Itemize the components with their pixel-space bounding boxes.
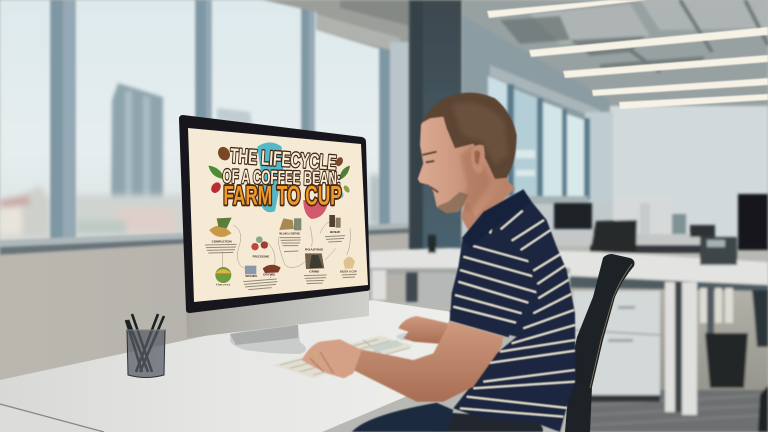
stage description text lines <box>205 236 357 290</box>
monitor chin <box>186 288 369 338</box>
stubble <box>438 192 468 214</box>
window blind at top <box>262 0 410 52</box>
stage labels: GRIND <box>309 270 319 274</box>
left windows <box>0 0 410 400</box>
pens <box>126 314 164 372</box>
eye and brow <box>422 152 437 162</box>
cheek shadow <box>460 145 492 212</box>
neck <box>461 177 515 233</box>
desk legs <box>372 270 697 415</box>
shirt sleeve stripes <box>453 245 537 323</box>
trousers <box>352 403 453 432</box>
title line three: FARM TO CUP <box>223 180 342 210</box>
chair armrest <box>433 413 543 432</box>
pen holder <box>126 314 165 378</box>
mid office desk <box>370 248 768 285</box>
distant skyscraper <box>111 83 252 215</box>
stage labels: ROASTING <box>305 248 324 252</box>
small desk object <box>428 235 436 253</box>
stage labels: PROCESSING <box>253 255 270 259</box>
collar <box>462 189 532 248</box>
far right chair <box>752 290 768 347</box>
shirt sleeve hem <box>450 310 515 337</box>
white posts behind <box>700 288 733 323</box>
ceiling and back wall <box>462 0 768 246</box>
monitor bezel <box>179 115 370 313</box>
filing cabinet <box>573 291 660 401</box>
ceiling lights <box>487 0 768 109</box>
hair <box>421 93 517 179</box>
shirt stripes <box>460 211 575 417</box>
distant city <box>0 175 380 238</box>
window return wall <box>390 42 410 228</box>
foreground desk <box>0 300 452 432</box>
window sill <box>0 223 410 248</box>
ceiling <box>462 0 768 110</box>
stage labels: BREW <box>330 230 340 234</box>
desk telephone <box>700 237 737 265</box>
monitor <box>179 115 370 354</box>
back monitors and partition <box>554 203 592 229</box>
waste bin <box>705 333 748 388</box>
dark column <box>409 0 462 252</box>
window frames <box>50 0 391 242</box>
window glass <box>0 0 405 250</box>
mesh cup <box>127 330 165 378</box>
polo shirt <box>450 189 576 432</box>
screen <box>188 128 368 302</box>
face <box>418 105 512 217</box>
stage labels: WASHING <box>245 274 258 278</box>
colour blobs behind title <box>257 142 283 212</box>
left wall in perspective <box>462 15 610 240</box>
back office chair <box>590 220 637 252</box>
stage connectors <box>223 221 350 278</box>
back wall <box>610 106 768 246</box>
title line one: THE LIFECYCLE <box>229 144 337 175</box>
monitor stand <box>230 325 306 354</box>
stage labels <box>212 230 357 286</box>
stage labels: MILLING & SORTING <box>279 232 301 236</box>
bean and leaf decorations <box>208 145 351 195</box>
mouse <box>396 333 413 341</box>
keyboard <box>273 336 413 378</box>
back desk <box>555 234 700 246</box>
near arm and hand <box>302 322 503 402</box>
infographic title <box>222 144 342 210</box>
wall below the windows <box>0 233 410 400</box>
floor <box>575 390 768 432</box>
seated man, drawn in 3x zoom coordinates <box>273 93 576 432</box>
ear <box>471 145 485 173</box>
head <box>418 93 517 217</box>
area under the mid desks <box>570 280 768 400</box>
stage labels: Harvest <box>216 282 230 286</box>
mouth and moustache <box>430 187 438 192</box>
stage labels: DRYING <box>263 273 276 277</box>
stage labels: COMPLETION <box>212 239 232 243</box>
far hand <box>398 316 448 344</box>
infographic content, drawn in 3x zoom coordinates <box>205 142 357 290</box>
far windows <box>488 76 507 196</box>
title line two: OF A COFFEE BEAN: <box>222 167 341 191</box>
stage icons <box>209 215 355 283</box>
background office furniture <box>370 194 768 432</box>
office chair back <box>565 254 634 432</box>
stage labels: ENJOY A CUP <box>340 269 357 273</box>
shirt base <box>450 189 576 432</box>
